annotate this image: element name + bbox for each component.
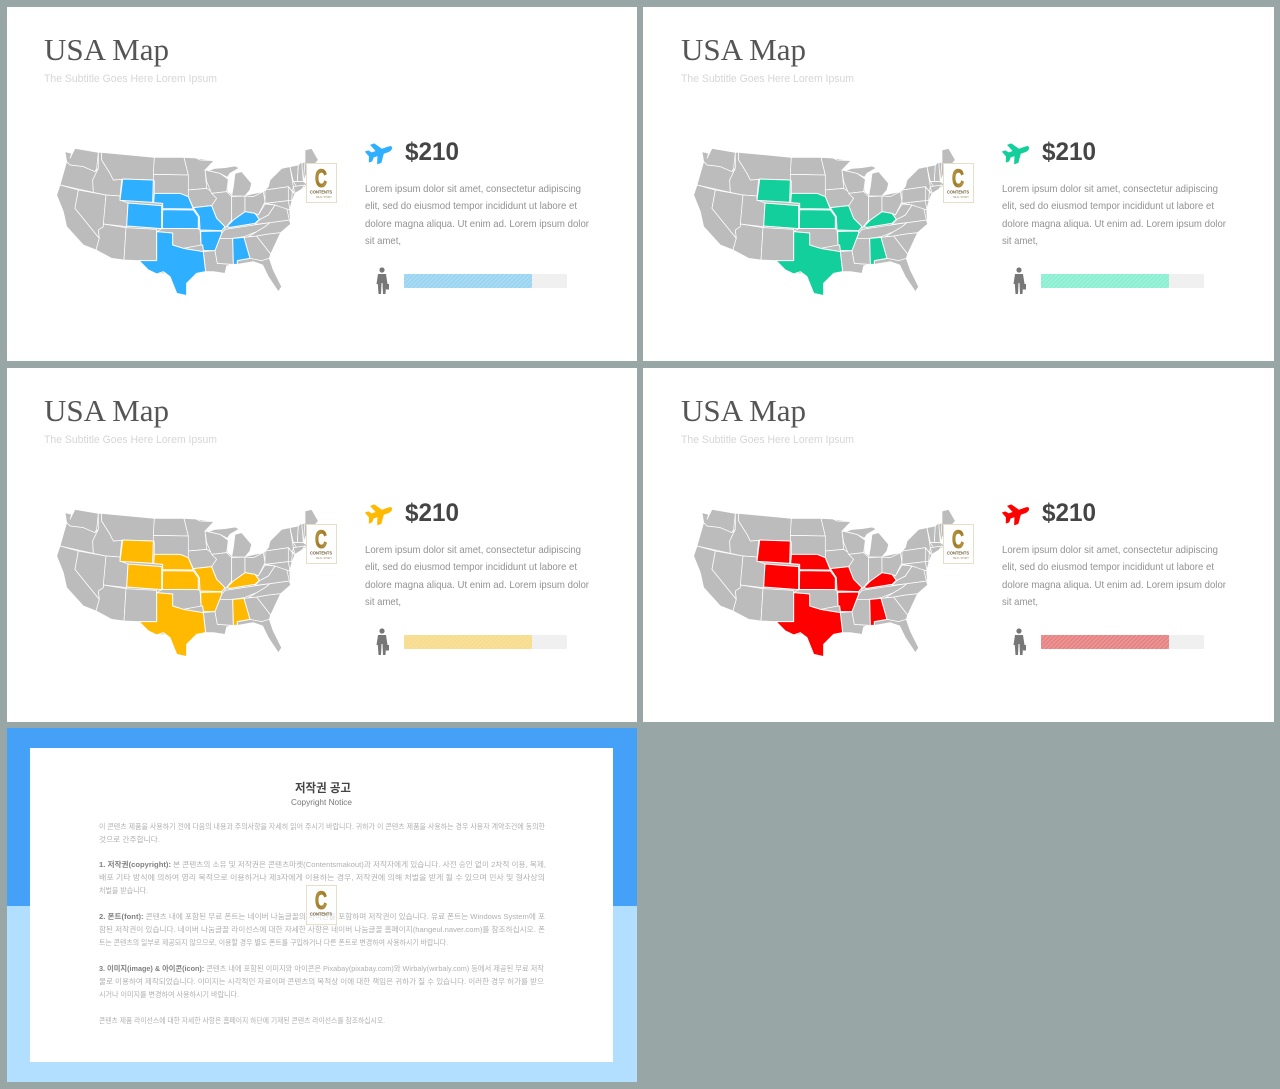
body text — [1002, 544, 1226, 608]
body text: elit, sed do eiusmod tempor incididunt ut labore et — [1002, 561, 1214, 573]
logo: CONTENTS — [310, 550, 332, 556]
logo: REAL STORY — [316, 196, 332, 199]
logo — [306, 164, 336, 202]
logo: REAL STORY — [953, 196, 969, 199]
body text: sit amet, — [1002, 596, 1038, 608]
body text: Lorem ipsum dolor sit amet, consectetur adipiscing — [365, 544, 581, 556]
price: $210 — [1042, 138, 1096, 166]
map: USA red — [694, 509, 955, 657]
progress bar — [404, 635, 567, 649]
logo: CONTENTS — [310, 912, 332, 916]
body text: dolore magna aliqua. Ut enim ad. Lorem ipsum dolor — [365, 218, 589, 230]
body text: dolore magna aliqua. Ut enim ad. Lorem ipsum dolor — [1002, 579, 1226, 591]
notice text: 3. 이미지(image) & 아이콘(icon): 콘텐츠 내에 포함된 이미지와 아이콘은 Pixabay(pixabay.com)와 Wirbaly(wirbaly.com) 등에서 제공된 무료 저작 — [99, 963, 544, 973]
map: USA blue — [57, 148, 318, 296]
logo: C — [315, 887, 327, 915]
icon: person — [376, 628, 389, 655]
notice text: 1. 저작권(copyright): 본 콘텐츠의 소유 및 저작권은 콘텐츠마켓(Contentsmakout)과 저작자에게 있습니다. 사전 승인 없이 2차적 이용, 복제, — [99, 859, 546, 869]
progress bar — [1041, 635, 1204, 649]
subtitle: The Subtitle Goes Here Lorem Ipsum — [681, 434, 854, 446]
map: USA green — [694, 148, 955, 296]
logo: REAL STORY — [316, 557, 332, 560]
title: USA Map — [681, 393, 806, 428]
notice text: 이 콘텐츠 제품을 사용하기 전에 다음의 내용과 주의사항을 자세히 읽어 주시기 바랍니다. 귀하가 이 콘텐츠 제품을 사용하는 경우 사용자 계약조건에 동의한 — [99, 821, 545, 831]
logo: REAL STORY — [953, 557, 969, 560]
icon: person — [1014, 267, 1026, 294]
panel: green slide — [643, 7, 1274, 361]
body text: elit, sed do eiusmod tempor incididunt ut labore et — [1002, 200, 1214, 212]
logo — [306, 524, 336, 564]
notice text: 콘텐츠 제품 라이선스에 대한 자세한 사항은 홈페이지 하단에 기재된 콘텐츠 라이선스를 참조하십시오. — [99, 1015, 385, 1025]
price: $210 — [405, 499, 459, 527]
map: USA yellow — [57, 509, 318, 657]
body text: sit amet, — [1002, 235, 1038, 247]
notice text: 것으로 간주합니다. — [99, 834, 160, 844]
logo: C — [952, 165, 964, 193]
panel: blue slide — [7, 7, 637, 361]
body text: sit amet, — [365, 235, 401, 247]
logo: CONTENTS — [947, 550, 969, 556]
body text: dolore magna aliqua. Ut enim ad. Lorem ipsum dolor — [365, 579, 589, 591]
price: $210 — [1042, 499, 1096, 527]
notice text: 함된 저작권이 있습니다. 네이버 나눔글꼴 라이선스에 대한 자세한 사항은 네이버 나눔글꼴 홈페이지(hangeul.naver.com)를 참조하십시오. 폰 — [99, 924, 545, 934]
body text: dolore magna aliqua. Ut enim ad. Lorem ipsum dolor — [1002, 218, 1226, 230]
logo: CONTENTS — [947, 190, 969, 194]
panel: yellow slide — [7, 368, 637, 722]
progress bar — [404, 274, 567, 288]
logo: C — [315, 165, 327, 193]
body text: elit, sed do eiusmod tempor incididunt ut labore et — [365, 200, 577, 212]
notice text: 시거나 이미지를 변경하여 사용하시기 바랍니다. — [99, 989, 239, 999]
logo: C — [315, 526, 327, 554]
icon: plane — [363, 499, 396, 528]
subtitle: The Subtitle Goes Here Lorem Ipsum — [44, 434, 217, 446]
logo: C — [952, 526, 964, 554]
logo — [944, 164, 974, 202]
logo — [944, 524, 974, 564]
title: USA Map — [681, 32, 806, 67]
notice text: 트는 콘텐츠의 일부로 제공되지 않으므로, 이용할 경우 별도 폰트를 구입하거나 다른 폰트로 변경하여 사용하시기 바랍니다. — [99, 937, 448, 947]
progress bar — [1041, 274, 1204, 288]
title: USA Map — [44, 393, 169, 428]
notice text: 물로 이용하여 제작되었습니다. 이미지는 시각적인 자료이며 콘텐츠의 목적상 이에 대한 책임은 귀하가 질 수 있습니다. 이러한 경우 허가를 받으 — [99, 976, 544, 986]
logo — [306, 886, 336, 924]
subtitle: The Subtitle Goes Here Lorem Ipsum — [44, 73, 217, 85]
body text — [365, 183, 589, 247]
body text: sit amet, — [365, 596, 401, 608]
panel: red slide — [643, 368, 1274, 722]
heading: 저작권 공고 — [295, 780, 351, 795]
panel: copyright notice — [7, 728, 637, 1082]
icon: person — [1014, 628, 1026, 655]
body text: elit, sed do eiusmod tempor incididunt ut labore et — [365, 561, 577, 573]
body text — [1002, 183, 1226, 247]
icon: plane — [1000, 499, 1033, 528]
body text: Lorem ipsum dolor sit amet, consectetur adipiscing — [365, 183, 581, 195]
notice text: 배포 기타 방식에 의하여 영리 목적으로 이용하거나 제3자에게 이용하는 경우, 저작권에 의해 처벌을 받게 될 수 있으며 민사 및 형사상의 — [99, 872, 545, 882]
notice text — [99, 821, 546, 1025]
icon: person — [376, 267, 389, 294]
body text: Lorem ipsum dolor sit amet, consectetur adipiscing — [1002, 183, 1218, 195]
icon: plane — [1000, 138, 1033, 167]
notice text: 처벌을 받습니다. — [99, 885, 148, 895]
logo: CONTENTS — [310, 190, 332, 194]
subheading: Copyright Notice — [291, 797, 352, 807]
body text — [365, 544, 589, 608]
icon: plane — [363, 138, 396, 167]
title: USA Map — [44, 32, 169, 67]
subtitle: The Subtitle Goes Here Lorem Ipsum — [681, 73, 854, 85]
body text: Lorem ipsum dolor sit amet, consectetur adipiscing — [1002, 544, 1218, 556]
price: $210 — [405, 138, 459, 166]
notice text: 2. 폰트(font): 콘텐츠 내에 포함된 무료 폰트는 네이버 나눔글꼴의 저작권을 포함하며 저작권이 있습니다. 유료 폰트는 Windows System에 포 — [99, 911, 545, 921]
